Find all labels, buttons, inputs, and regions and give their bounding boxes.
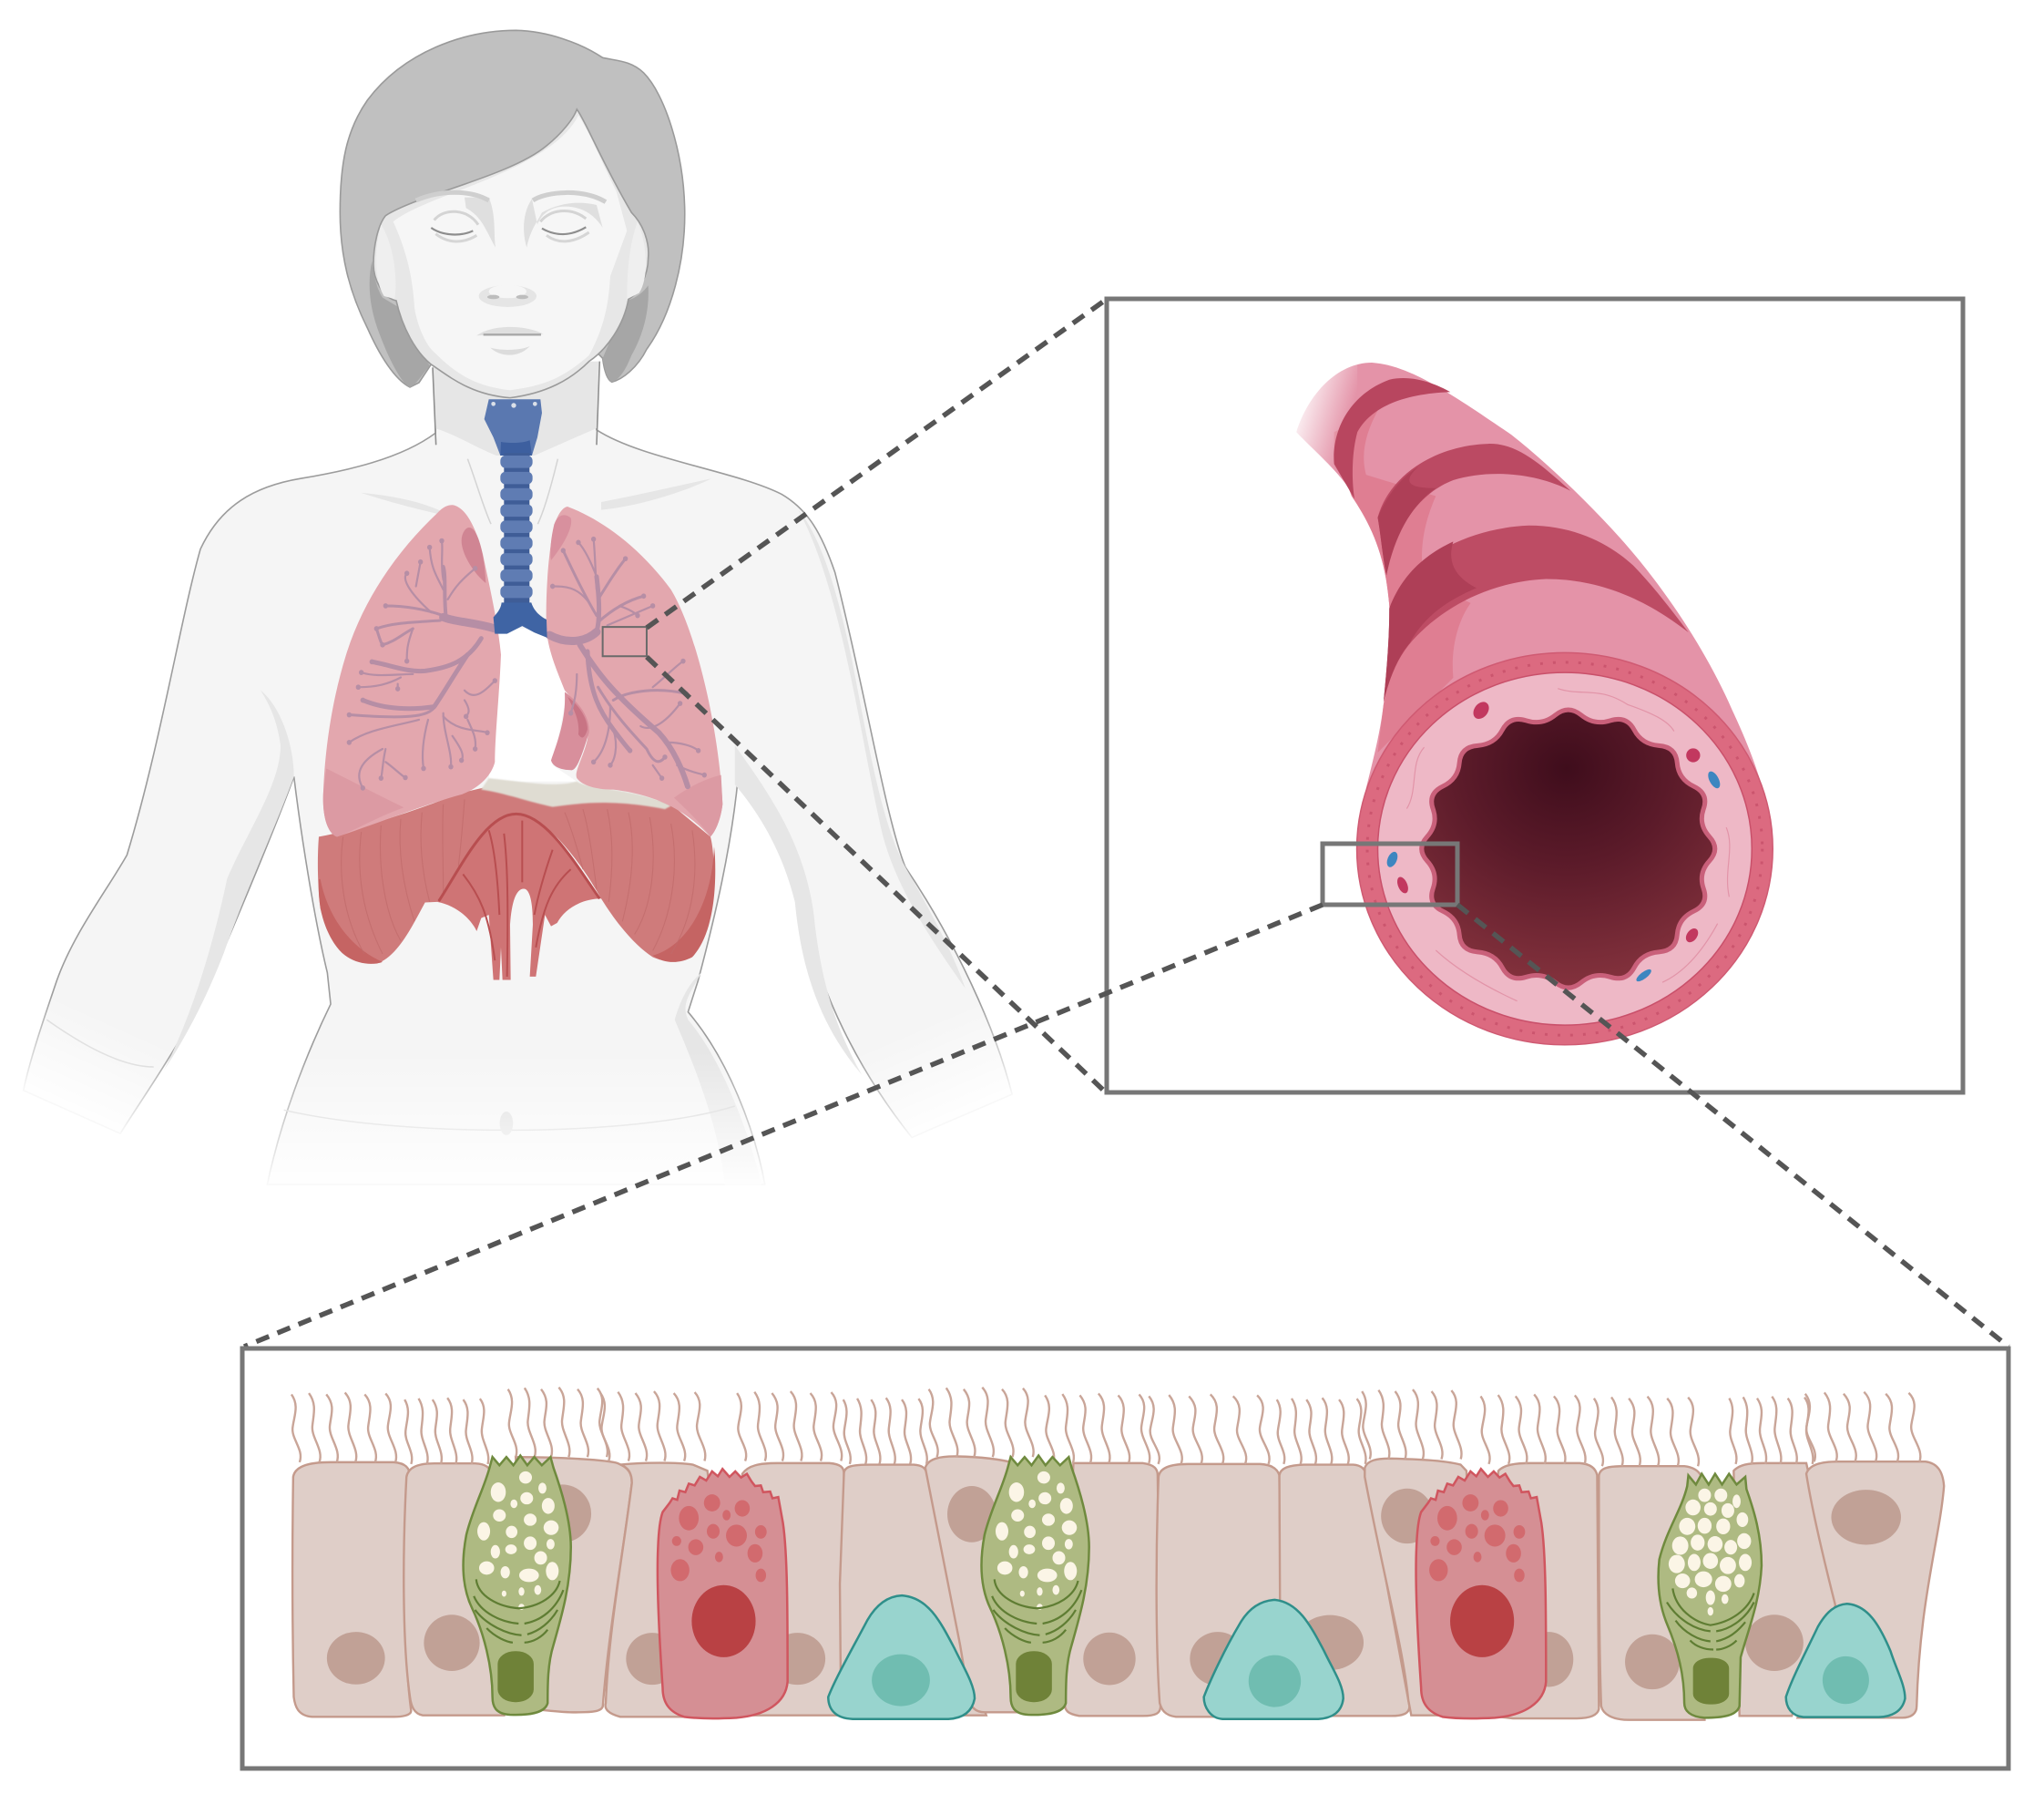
vessels pink (1395, 700, 1701, 944)
dashed line lung to airway bottom (647, 657, 1106, 1092)
airway tube body (1296, 363, 1773, 924)
dashed line lung to airway top (647, 300, 1106, 628)
cartilage band 1 (1334, 378, 1450, 498)
vessels blue (1385, 770, 1722, 983)
hair silhouette (340, 30, 685, 387)
lumen (1422, 710, 1715, 988)
mouth (476, 327, 544, 355)
ciliated cells left half (292, 1456, 1160, 1717)
left brow and eye (416, 192, 489, 241)
bronchial tree right lung (549, 539, 704, 786)
bronchial tree left lung (349, 541, 495, 788)
cartilage band 2 (1378, 444, 1570, 575)
navel (500, 1112, 513, 1135)
trachea (494, 453, 547, 638)
club cell 2 (1416, 1469, 1546, 1718)
outer wall ring (1357, 652, 1773, 1045)
diaphragm (318, 786, 715, 980)
thorax organs (318, 453, 722, 979)
mucosa ring (1378, 672, 1752, 1025)
panel frame (1107, 299, 1963, 1092)
cilia (291, 1388, 1920, 1466)
goblet cell 2 (982, 1455, 1089, 1715)
left lung lower lobe (323, 768, 404, 836)
hair lower shade left (370, 261, 430, 387)
basal cell 3 (1786, 1604, 1905, 1717)
eye socket shading (465, 198, 603, 248)
band 3 left dark part (1384, 541, 1477, 702)
right arm fade (822, 980, 1048, 1153)
tracheal rings (500, 456, 533, 598)
band 2 left dark part (1378, 466, 1436, 575)
airway illustration (1279, 352, 1773, 1045)
left lung (323, 505, 501, 836)
heart notch of right lung (551, 692, 589, 770)
face (373, 109, 649, 398)
club cell 1 (658, 1469, 788, 1718)
neck outlines (433, 362, 599, 445)
left arm fade (0, 980, 227, 1153)
panel: airway cross-section (1107, 299, 1963, 1092)
goblet cells and secretory cells (464, 1455, 1546, 1718)
torso fade (227, 1051, 822, 1193)
basal cell 1 (828, 1595, 975, 1719)
head (370, 109, 649, 456)
right brow and eye (533, 192, 606, 241)
neck shade (433, 362, 598, 456)
mucosa fine lines (1406, 689, 1730, 1001)
zoom box on airway wall (1323, 844, 1457, 905)
bronchiole end dots left (347, 538, 497, 791)
goblet cell 3 (1659, 1474, 1762, 1717)
tube left shade (1334, 411, 1471, 753)
face light area (393, 116, 627, 390)
diaphragm dark edges (319, 846, 715, 964)
panel: epithelium (242, 1348, 2008, 1768)
neck and waist lines (46, 459, 735, 1130)
dashed line airway to epithelium right (1457, 905, 2008, 1347)
dashed line airway to epithelium left (244, 905, 1323, 1347)
ciliated cells right half (1157, 1459, 1944, 1720)
body and arms (24, 369, 1012, 1184)
epithelium frame (242, 1348, 2008, 1768)
figure: woman with lungs (0, 30, 1048, 1193)
lung upper dark patches (462, 515, 571, 583)
right lung lower lobe (674, 775, 722, 836)
ears (376, 221, 646, 299)
cartilage band 3 (1384, 526, 1689, 702)
membrane band (481, 778, 671, 809)
right lung (547, 507, 722, 836)
zoom dashed lines (244, 300, 2008, 1347)
goblet cell 1 (464, 1455, 571, 1715)
basal cell 2 (1204, 1600, 1344, 1719)
tube fade (1279, 352, 1357, 475)
tendon dark lines (439, 814, 599, 977)
body shading (164, 478, 966, 1184)
larynx (485, 399, 542, 456)
diaphragm fibres (342, 799, 695, 954)
bronchiole end dots right (550, 537, 707, 789)
central tendon fan (437, 814, 601, 980)
bronchi bifurcation (494, 602, 547, 638)
nose (479, 285, 537, 307)
wall texture (1367, 662, 1763, 1035)
hair lower shade right (603, 285, 649, 382)
zoom box on lung (603, 627, 647, 656)
notch dark fold (567, 697, 588, 737)
torso and arms body shape (24, 369, 1012, 1184)
white mediastinum gap (489, 629, 577, 782)
